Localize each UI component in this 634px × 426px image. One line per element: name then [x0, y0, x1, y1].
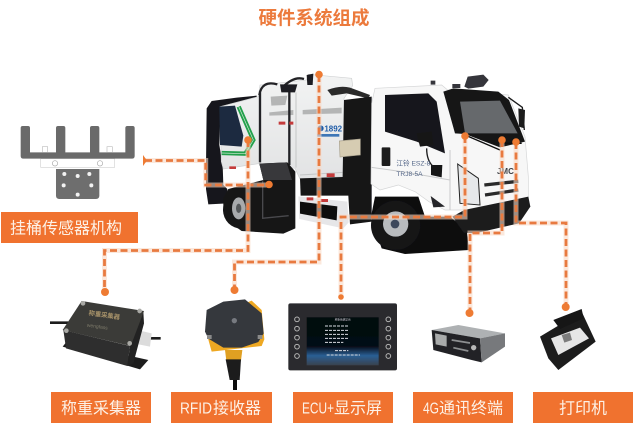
hydraulic arms [259, 78, 304, 165]
windshield [443, 88, 525, 147]
lift cylinder heads [280, 74, 313, 92]
headlight [458, 164, 480, 205]
rear lower guard [223, 162, 295, 234]
front face [432, 330, 482, 362]
connector: RFID receiver [230, 71, 323, 294]
rear wheel [223, 191, 260, 229]
4G terminal device [432, 325, 505, 362]
bracket outline [41, 159, 115, 167]
mirror arms [427, 97, 524, 167]
label: RFID receiver [171, 392, 272, 423]
rear black frame [206, 96, 257, 204]
clips [42, 147, 112, 152]
side window [385, 93, 445, 153]
device label: 称重采集器 [88, 308, 121, 321]
corner screws [64, 301, 142, 346]
bezel [288, 303, 397, 370]
printed code [562, 333, 572, 343]
bumper [452, 197, 530, 233]
connector: ECU display [338, 132, 469, 300]
connector: hanger sensor [143, 155, 273, 188]
waste body [220, 74, 353, 179]
windshield glass [460, 101, 518, 133]
front knob [471, 345, 476, 350]
engine bay [300, 97, 372, 224]
truck cab section [371, 75, 530, 254]
JMC badge: JMC [497, 167, 514, 176]
door mirror [417, 132, 442, 177]
screen data rows [325, 326, 360, 355]
RFID receiver device [205, 299, 264, 390]
truck cab section: TRJ8-5A [396, 171, 423, 178]
prongs [21, 126, 135, 159]
side buttons [295, 317, 391, 358]
side guard panel [298, 196, 349, 228]
label: 4G terminal: 通讯终端 [439, 400, 503, 418]
plate holes [62, 172, 93, 197]
label: ECU display [293, 392, 393, 423]
connector: weighing collector [101, 136, 252, 296]
box front [63, 330, 130, 366]
top face [432, 325, 505, 338]
seams [296, 92, 343, 175]
green chevron stripe [222, 107, 253, 154]
pivots [52, 161, 103, 166]
base plate [63, 342, 148, 369]
front wheel [371, 201, 420, 250]
connector: 4G terminal [466, 136, 506, 317]
upper body recess [269, 96, 342, 116]
label: ECU display: ECU+ [302, 400, 334, 418]
box top [63, 301, 144, 346]
chevron inner stripe [222, 107, 253, 154]
label: printer [533, 392, 633, 423]
label: 4G terminal: 4G [423, 400, 439, 418]
lid [553, 309, 584, 329]
front display [435, 333, 447, 347]
step frame [262, 180, 289, 218]
hanger sensor mechanism [21, 126, 135, 199]
cable [229, 378, 241, 390]
antenna cover [205, 299, 264, 348]
paper [551, 328, 589, 355]
door lettering: 江铃 ESZ-8 [396, 159, 431, 168]
grille [484, 181, 518, 195]
mounting plate [56, 169, 99, 199]
label: hanger sensor mechanism [1, 212, 138, 243]
wheel arch and chassis [371, 197, 469, 254]
door handle [382, 147, 390, 166]
label: weighing collector: 称重采集器 [61, 400, 141, 418]
label: printer: 打印机 [559, 400, 607, 418]
reflectors [229, 122, 335, 177]
housing [540, 312, 596, 370]
gland [137, 330, 152, 347]
right mirror [518, 108, 525, 128]
yellow housing [206, 301, 264, 352]
plug [226, 359, 241, 380]
side lamp [431, 196, 445, 207]
side face [480, 333, 505, 362]
beige control box [339, 139, 360, 157]
centre screw [232, 318, 237, 323]
company logo [317, 124, 343, 137]
label: hanger sensor mechanism: 挂桶传感器机构 [10, 220, 122, 238]
front slots [452, 340, 470, 351]
door line [372, 150, 450, 210]
rear window [219, 106, 243, 147]
ECU display device [288, 303, 397, 370]
label: 4G terminal [413, 392, 513, 423]
cab shell [371, 85, 528, 210]
label: weighing collector [51, 392, 151, 423]
connector: printer [512, 138, 570, 311]
connector [225, 350, 242, 361]
label: RFID receiver: 接收器 [213, 400, 261, 418]
company logo: 1892 [324, 124, 343, 133]
truck rear section [206, 74, 372, 234]
device sublabel: wengfass [86, 323, 109, 332]
screen [307, 317, 379, 365]
box side [127, 312, 144, 366]
hopper top [259, 162, 292, 180]
side screws [207, 335, 262, 339]
screen heading: 称重系统显示 [335, 317, 351, 321]
cable [50, 323, 161, 338]
top hoses [327, 87, 370, 98]
title: 硬件系统组成 [258, 8, 370, 28]
wipers [465, 135, 522, 150]
printer device [540, 309, 596, 370]
weighing collector device [50, 301, 161, 369]
roof antenna [431, 75, 489, 89]
label: ECU display: 显示屏 [334, 400, 382, 418]
label: RFID receiver: RFID [180, 400, 212, 418]
